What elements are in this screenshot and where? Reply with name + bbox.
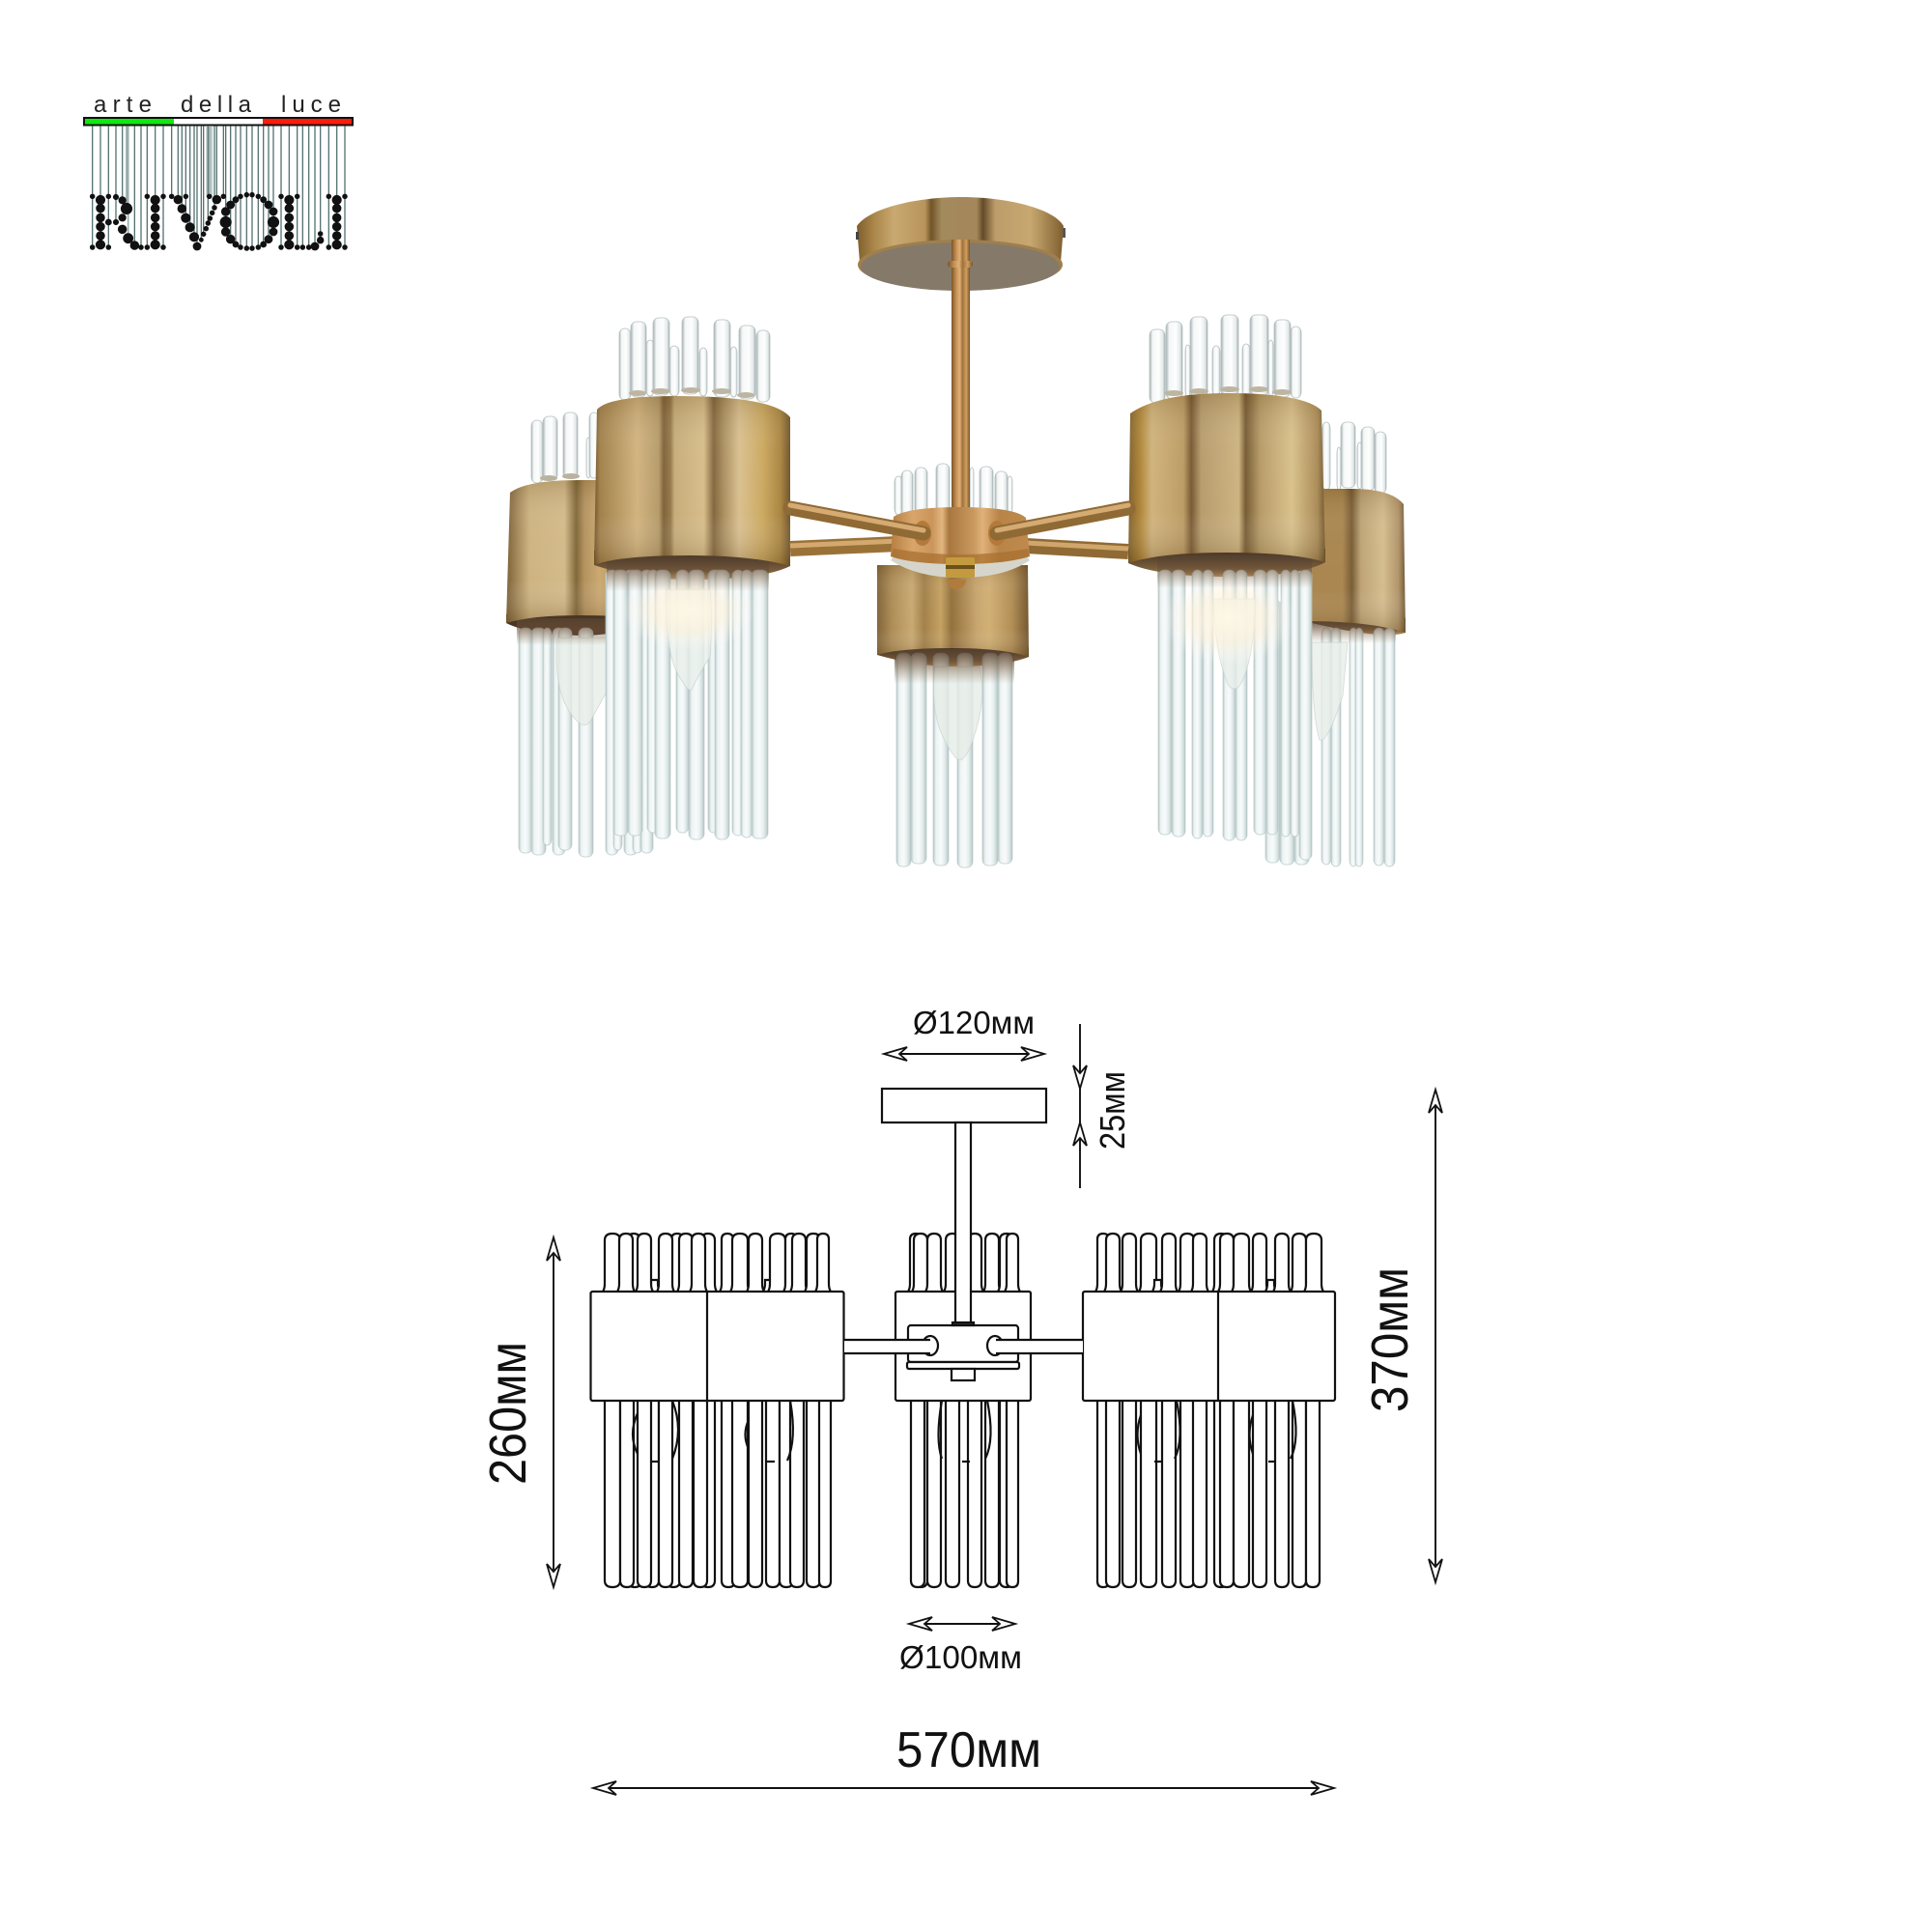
right back lamp [1304, 422, 1406, 867]
dimension: plate thickness [1073, 1024, 1132, 1188]
left front lamp [594, 317, 790, 855]
logo tagline [94, 92, 341, 118]
right lamp upper rods [1095, 1234, 1323, 1292]
dimension: plate thickness: 25мм [1093, 1071, 1132, 1150]
chandelier photo [506, 197, 1406, 867]
line: hub [907, 1322, 1019, 1380]
lamp arms [790, 541, 1128, 552]
dimension: total width [593, 1722, 1334, 1795]
dimension: total width: 570мм [896, 1722, 1041, 1778]
line: arms [844, 1340, 1083, 1353]
ceiling plate [856, 197, 1065, 291]
centre lamp lower rods [911, 1401, 1018, 1587]
centre lamp [877, 565, 1029, 867]
left lamp lower rods [605, 1401, 831, 1587]
line: stem [955, 1122, 971, 1325]
left back lamp [506, 412, 623, 857]
line: left shades [591, 1292, 844, 1401]
dimension: shade diameter: Ø100мм [899, 1639, 1022, 1675]
dimension: top plate diameter [884, 1005, 1044, 1061]
upper arms into hub [790, 505, 1128, 533]
left lamp upper rods [603, 1234, 831, 1292]
logo: Rivoli arte della luce [83, 92, 354, 250]
dimension: total height: 370мм [1361, 1267, 1419, 1412]
central hub [891, 507, 1030, 589]
dimension: lamp height: 260мм [479, 1342, 537, 1485]
right front lamp [1128, 315, 1325, 865]
dimension: lamp height [479, 1237, 560, 1587]
dimension: total height [1361, 1090, 1442, 1582]
technical line drawing [591, 1089, 1335, 1587]
centre lamp upper rods [908, 1234, 1020, 1292]
line: ceiling plate [882, 1089, 1046, 1122]
dimension: shade diameter [899, 1617, 1022, 1675]
logo tagline: arte [94, 92, 152, 118]
line: centre shade [895, 1292, 1031, 1401]
line: right shades [1083, 1292, 1335, 1401]
centre lamp upper glass rods [895, 464, 1012, 515]
logo tagline: luce [281, 92, 341, 118]
right lamp lower rods [1097, 1401, 1320, 1587]
dimension: top plate diameter: Ø120мм [913, 1005, 1035, 1040]
logo wordmark of hanging beads [90, 126, 347, 250]
logo tagline: della [181, 92, 252, 118]
tricolour bar [83, 117, 354, 126]
central stem [948, 240, 973, 510]
